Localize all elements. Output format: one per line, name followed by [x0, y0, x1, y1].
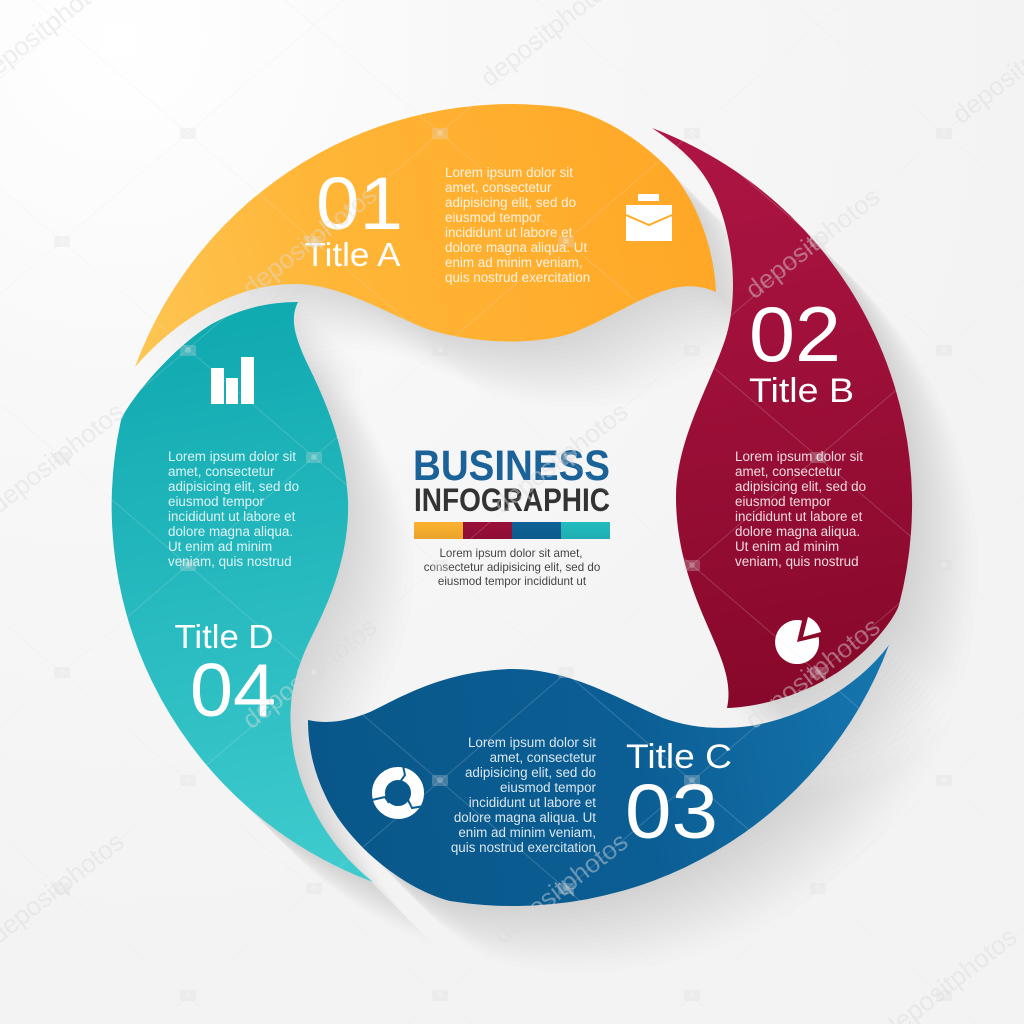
text block B: Ut enim ad minim	[735, 539, 839, 554]
center text: consectetur adipisicing elit, sed do	[424, 561, 600, 574]
text block D	[168, 449, 299, 569]
number 01: 01	[316, 162, 403, 245]
text block B	[735, 449, 866, 569]
title D: Title D	[174, 618, 274, 655]
panel: 01 Title A	[135, 104, 716, 367]
watermark text: depositphotos	[487, 396, 633, 520]
text block C: enim ad minim veniam,	[458, 825, 596, 840]
text block C: amet, consectetur	[490, 750, 597, 765]
text block A: eiusmod tempor	[445, 210, 542, 225]
panel: 04 Title D	[112, 302, 373, 882]
text block A: dolore magna aliqua. Ut	[445, 240, 587, 255]
text block C: adipisicing elit, sed do	[465, 765, 596, 780]
title C: Title C	[626, 738, 732, 776]
number 02: 02	[749, 290, 841, 378]
text block D: incididunt ut labore et	[168, 509, 296, 524]
number 04: 04	[190, 648, 276, 732]
text block A: adipisicing elit, sed do	[445, 195, 576, 210]
watermark text: depositphotos	[236, 611, 382, 735]
icon: cycle arrows	[372, 766, 424, 812]
text block B: Lorem ipsum dolor sit	[735, 449, 863, 464]
text block C: Lorem ipsum dolor sit	[468, 735, 596, 750]
text block A	[445, 165, 590, 285]
center text	[424, 547, 600, 588]
text block D: Ut enim ad minim	[168, 539, 272, 554]
text block C: dolore magna aliqua. Ut	[454, 810, 596, 825]
text block B: incididunt ut labore et	[735, 509, 863, 524]
heading: BUSINESS: BUSINESS	[413, 442, 610, 490]
icon: briefcase	[626, 194, 672, 241]
text block A: enim ad minim veniam,	[445, 255, 583, 270]
text block D: adipisicing elit, sed do	[168, 479, 299, 494]
title B: Title B	[749, 372, 854, 410]
text block B: adipisicing elit, sed do	[735, 479, 866, 494]
text block D: Lorem ipsum dolor sit	[168, 449, 296, 464]
title A: Title A	[304, 237, 401, 274]
text block B: amet, consectetur	[735, 464, 842, 479]
icon: bar chart	[211, 357, 254, 404]
text block A: amet, consectetur	[445, 180, 552, 195]
number 03: 03	[625, 769, 718, 855]
text block D: dolore magna aliqua.	[168, 524, 293, 539]
text block C	[451, 735, 597, 855]
colour bar	[414, 522, 610, 539]
heading: INFOGRAPHIC: INFOGRAPHIC	[414, 482, 610, 518]
text block B: dolore magna aliqua.	[735, 524, 860, 539]
text block A: Lorem ipsum dolor sit	[445, 165, 573, 180]
text block D: eiusmod tempor	[168, 494, 265, 509]
text block D: amet, consectetur	[168, 464, 275, 479]
text block B: veniam, quis nostrud	[735, 554, 859, 569]
watermark text: depositphotos	[739, 611, 885, 735]
text block B: eiusmod tempor	[735, 494, 832, 509]
panel: 03 Title C	[308, 645, 889, 906]
text block C: incididunt ut labore et	[469, 795, 596, 810]
watermark camera icons	[54, 128, 952, 1001]
center heading block	[413, 442, 610, 588]
center text: eiusmod tempor incididunt ut	[438, 575, 587, 588]
text block D: veniam, quis nostrud	[168, 554, 292, 569]
watermark text: depositphotos	[739, 181, 885, 305]
panel: 02 Title B	[652, 128, 912, 708]
text block A: incididunt ut labore et	[445, 225, 573, 240]
text block C: quis nostrud exercitation	[451, 840, 596, 855]
watermark text: depositphotos	[487, 826, 633, 950]
center text: Lorem ipsum dolor sit amet,	[439, 547, 583, 560]
long drop shadows	[115, 107, 978, 972]
text block C: eiusmod tempor	[500, 780, 597, 795]
watermark text: depositphotos	[236, 179, 382, 303]
icon: pie chart	[775, 617, 821, 664]
text block A: quis nostrud exercitation	[445, 270, 590, 285]
